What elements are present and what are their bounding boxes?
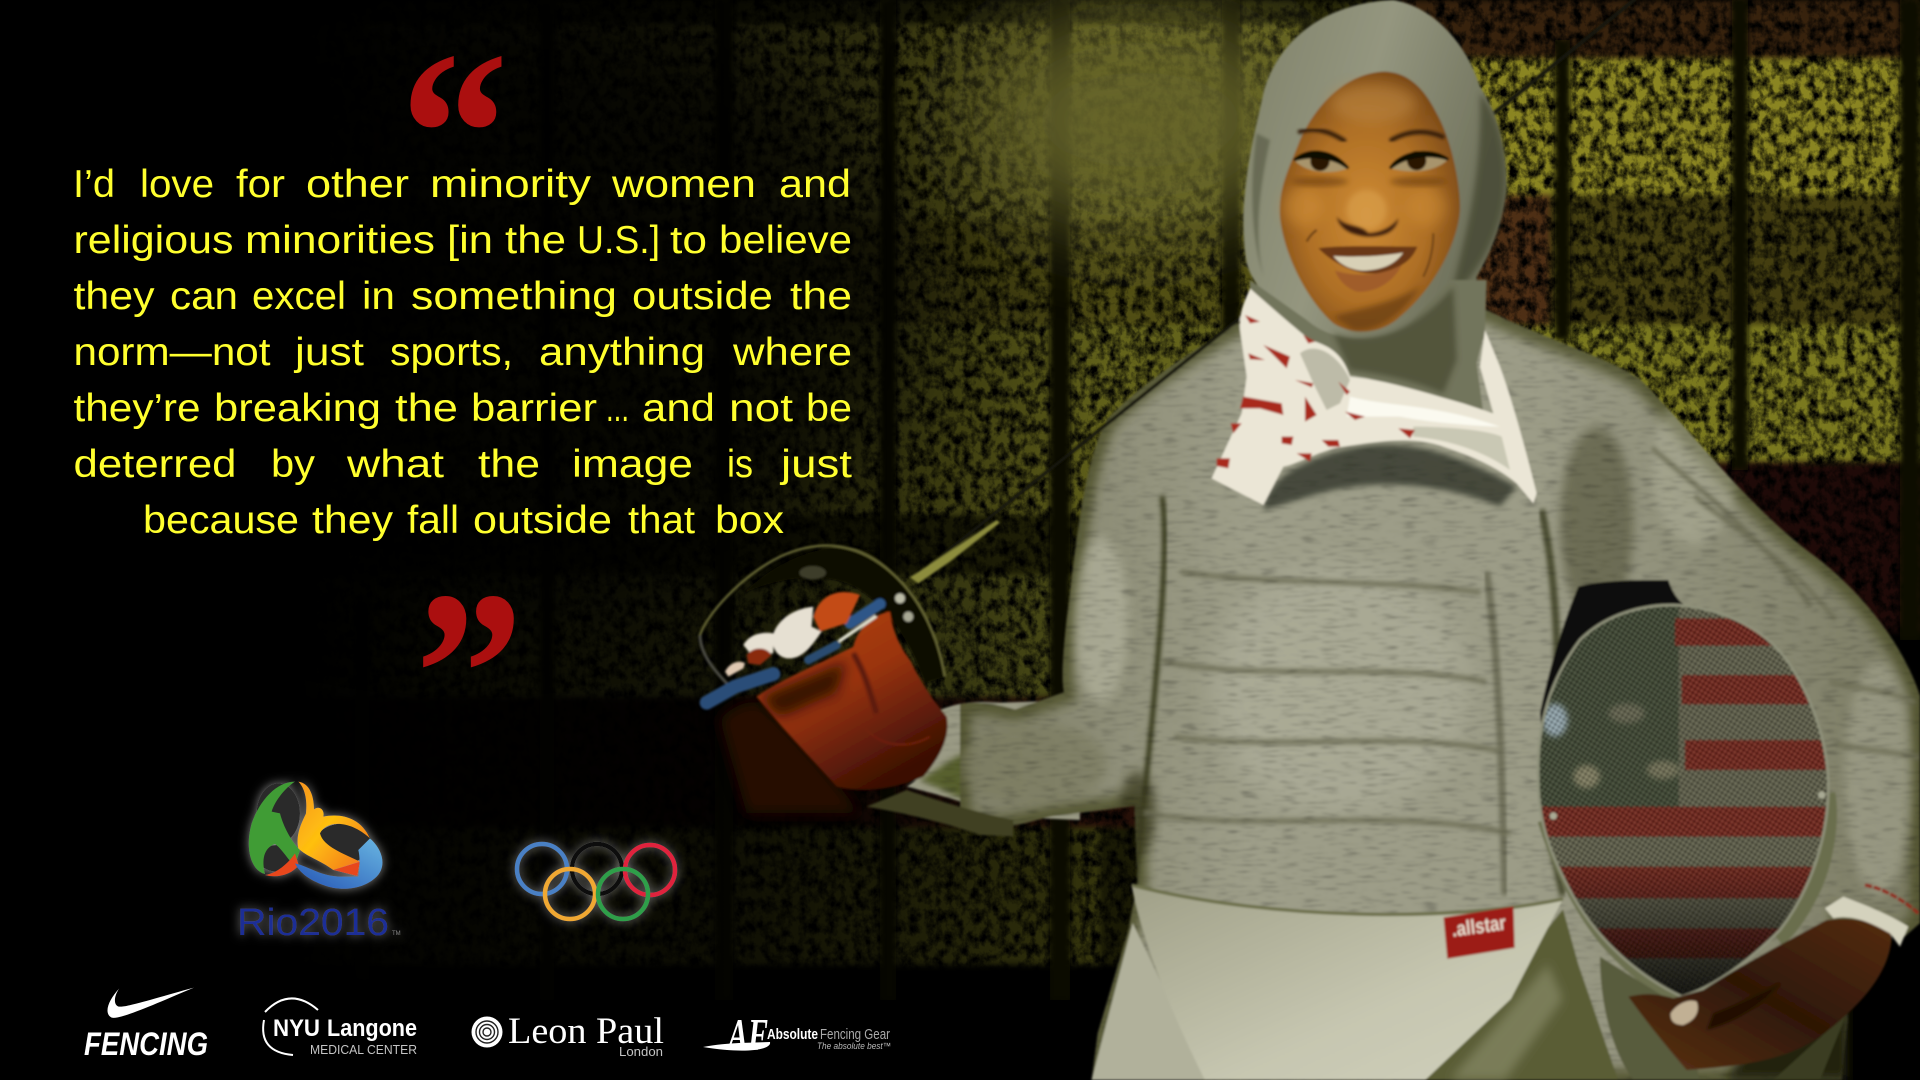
quote text: love [140, 163, 214, 206]
bell guard and weapon [700, 520, 1000, 790]
armpit shadow [1540, 580, 1817, 813]
logo: Leon Paul London: Leon Paul [508, 1011, 664, 1052]
quote text: something [411, 275, 617, 318]
mouth [1307, 230, 1433, 292]
quote text [73, 163, 852, 542]
quote text: women [611, 163, 756, 206]
icon: closing quotation mark: ” [415, 544, 524, 805]
quote text: sports, [390, 331, 513, 374]
quote text: box [715, 499, 785, 542]
logo: Rio 2016: Rio2016 [237, 902, 389, 944]
quote text: that [628, 499, 695, 542]
quote text: barrier [471, 387, 597, 430]
quote text: by [271, 443, 316, 486]
quote text: the [478, 443, 540, 486]
allstar tag: .allstar [1451, 911, 1507, 942]
figure: fencer [700, 0, 1920, 1080]
logo: NYU Langone Medical Center: Langone [327, 1015, 417, 1042]
quote text: deterred [74, 443, 236, 486]
lower jacket and breeches [1092, 885, 1848, 1080]
quote text: can [170, 275, 238, 318]
logo: NYU Langone Medical Center: MEDICAL CENTER [310, 1042, 417, 1057]
jacket [907, 310, 1920, 1080]
logo: Absolute Fencing Gear: Absolute [767, 1026, 818, 1043]
face [1280, 72, 1460, 332]
logo: Absolute Fencing Gear: Fencing Gear [820, 1026, 890, 1043]
wall planks [542, 0, 1920, 1000]
collar shadow [1263, 445, 1517, 510]
mask hand [1628, 885, 1918, 1070]
quote text: is [727, 443, 753, 486]
quote text: I’d [73, 163, 115, 206]
quote text: outside [632, 275, 773, 318]
quote text: the [505, 219, 566, 262]
cuff [1825, 897, 1908, 947]
quote text: excel [252, 275, 346, 318]
glove shadow [720, 702, 860, 813]
quote text: the [790, 275, 852, 318]
plastron [1131, 885, 1563, 1080]
logo: Olympic rings [517, 844, 675, 919]
logo: Leon Paul London [472, 1011, 664, 1059]
quote text: fall [407, 499, 459, 542]
quote text: because [143, 499, 299, 542]
nose [1337, 190, 1398, 237]
logo: Leon Paul London: London [619, 1044, 663, 1059]
wall haze [970, 10, 1310, 230]
logo: Nike Fencing: FENCING [84, 1026, 208, 1062]
quote text: norm—not [74, 331, 271, 374]
quote text: minorities [245, 219, 435, 262]
hijab [1243, 0, 1507, 340]
quote text: be [806, 387, 852, 430]
quote text: in [362, 275, 395, 318]
grip [707, 674, 773, 703]
sleeve underside [867, 790, 1013, 837]
quote text: what [346, 443, 444, 486]
logo: NYU Langone Medical Center [263, 998, 417, 1057]
quote text: they [74, 275, 155, 318]
quote text: other [306, 163, 409, 206]
fingernail [1671, 1001, 1698, 1025]
quote text: not [729, 387, 793, 430]
quote text: U.S.] [577, 219, 660, 262]
logo: NYU Langone Medical Center: NYU [273, 1015, 320, 1042]
quote text: outside [473, 499, 612, 542]
quote text: religious [74, 219, 234, 262]
quote text: breaking [214, 387, 381, 430]
logo: Absolute Fencing Gear: The absolute best™ [817, 1041, 891, 1051]
quote text: just [780, 443, 852, 486]
quote text: for [236, 163, 285, 206]
shadow behind quote [30, 0, 910, 600]
logo: Rio 2016: TM [392, 931, 401, 937]
logo: Absolute Fencing Gear [703, 1009, 891, 1060]
quote text: ... [606, 387, 629, 430]
white collar [1212, 288, 1537, 505]
fencing mask [1533, 600, 1847, 1080]
collar red marks [1217, 315, 1415, 468]
quote text: and [779, 163, 851, 206]
quote text: image [572, 443, 693, 486]
logo: Nike Fencing [84, 988, 208, 1062]
fingers [772, 607, 822, 658]
sabre blade [930, 0, 1634, 565]
quote text: the [395, 387, 458, 430]
glove [757, 612, 947, 790]
quote text: they [312, 499, 394, 542]
icon: opening quotation mark: “ [400, 4, 509, 265]
quote text: [in [447, 219, 493, 262]
allstar tag [1444, 906, 1515, 959]
quote text: anything [539, 331, 705, 374]
quote text: to [670, 219, 707, 262]
quote text: believe [719, 219, 852, 262]
neck scarf [1212, 280, 1537, 510]
quote text: where [732, 331, 852, 374]
quote text: just [294, 331, 364, 374]
eyebrows [1300, 130, 1443, 141]
quote text: they’re [74, 387, 200, 430]
quote text: minority [430, 163, 592, 206]
eyes [1292, 151, 1448, 186]
logo: Absolute Fencing Gear: AF [726, 1009, 768, 1060]
logo: Rio 2016 [237, 782, 401, 944]
panel: wooden flag wall [462, 0, 1920, 1000]
mask padding [1545, 820, 1680, 1000]
quote text: and [642, 387, 715, 430]
